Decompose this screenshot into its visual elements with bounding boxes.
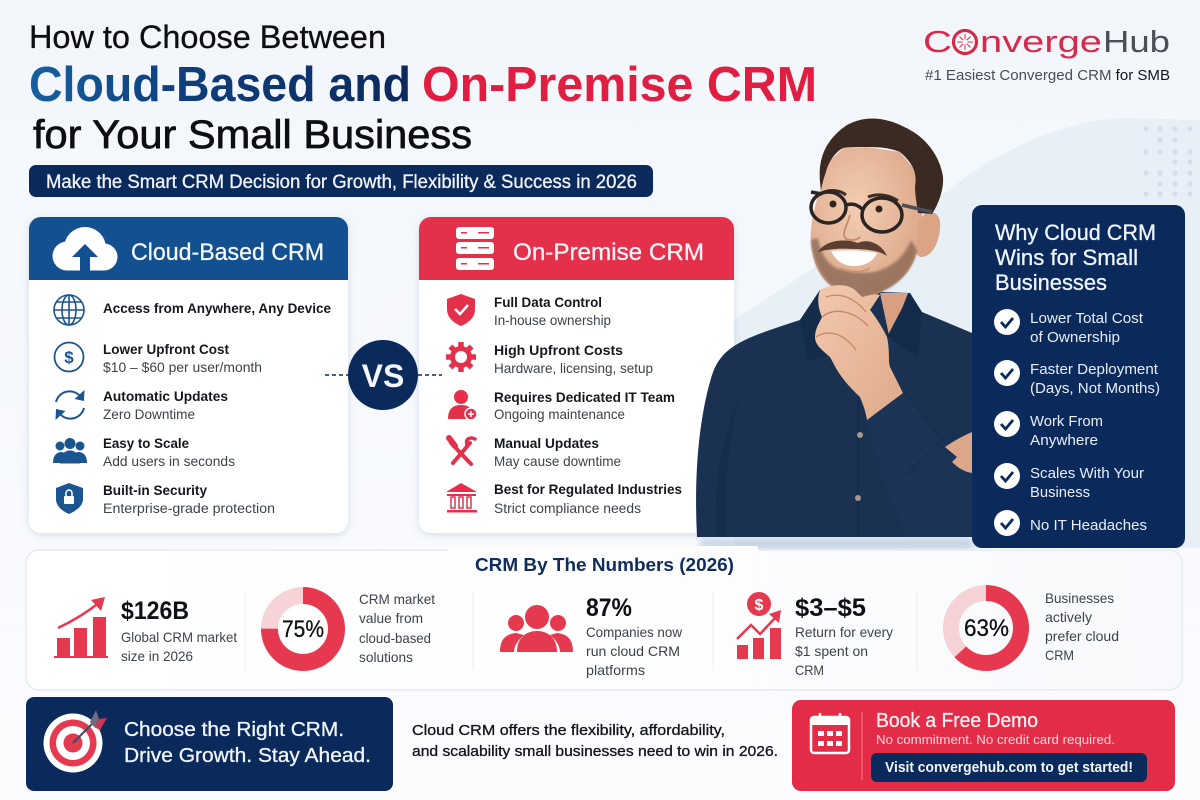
row: high upfront costs	[494, 342, 653, 376]
icon: return on investment: $	[755, 597, 764, 614]
row: built-in security	[103, 482, 275, 516]
row: full data control	[494, 294, 611, 328]
stat: $126B: $126B	[121, 597, 189, 625]
panel: CRM by the numbers	[26, 546, 1182, 690]
row: regulated industries: Strict compliance needs	[494, 500, 641, 516]
stat label: prefer cloud: CRM	[1045, 647, 1074, 663]
donut: 75%	[270, 596, 336, 662]
VS badge: VS	[362, 358, 404, 394]
subtitle pill: Make the Smart CRM Decision for Growth, Flexibility & Success in 2026	[46, 172, 637, 193]
icon: dollar	[54, 342, 84, 372]
donut: 63%: 63%	[964, 615, 1009, 642]
icon: calendar	[811, 713, 849, 753]
logo: ConvergeHub: Hub	[1103, 24, 1170, 59]
title block: How to Choose Between	[29, 19, 386, 55]
stat: $3–$5: $1 spent on	[795, 643, 868, 659]
logo: ConvergeHub	[923, 24, 1170, 84]
stat: $3–$5	[795, 594, 893, 678]
stat: 87%	[586, 594, 683, 678]
on-premise header	[419, 217, 734, 280]
icon: IT person	[448, 390, 477, 420]
stat: 87%: platforms	[586, 662, 645, 678]
banner: choose the right CRM: Drive Growth. Stay Ahead.	[124, 745, 371, 767]
why heading: Why Cloud CRM	[995, 220, 1156, 245]
row: lower upfront cost: $10 – $60 per user/month	[103, 359, 262, 375]
stat label: prefer cloud	[1045, 590, 1119, 663]
logo: ConvergeHub: #1 Easiest Converged CRM for SMB	[925, 68, 1170, 84]
stat label: market value: value from	[359, 610, 423, 626]
title block	[29, 19, 817, 157]
cloud header: Cloud-Based CRM	[131, 239, 324, 266]
closing statement	[412, 723, 778, 760]
icon: market growth chart	[54, 597, 108, 658]
call to action: book a free demo: No commitment. No credit card required.	[876, 733, 1115, 747]
row: dedicated IT team	[494, 389, 675, 422]
row: automatic updates: Automatic Updates	[103, 388, 228, 404]
stat label: market value: CRM market	[359, 591, 435, 607]
illustration: smiling man in navy shirt	[696, 118, 972, 550]
logo: ConvergeHub: C	[923, 24, 952, 59]
icon: security shield	[56, 483, 83, 514]
stat: 87%: run cloud CRM	[586, 643, 680, 659]
row: automatic updates: Zero Downtime	[103, 406, 195, 422]
title block: for Your Small Business	[33, 113, 472, 157]
stat: 87%: 87%	[586, 594, 632, 622]
check: faster deployment: Faster Deployment	[1030, 361, 1159, 378]
logo: ConvergeHub: nverge	[980, 24, 1102, 59]
row: dedicated IT team: Requires Dedicated IT Team	[494, 389, 675, 405]
check: work from anywhere: Work From	[1030, 413, 1103, 430]
closing statement: Cloud CRM offers the flexibility, affordability,	[412, 723, 725, 739]
row: manual updates: Manual Updates	[494, 435, 599, 451]
stat label: prefer cloud: actively	[1045, 609, 1092, 625]
row: manual updates	[494, 435, 621, 469]
title block: Cloud-Based and	[29, 58, 411, 112]
why heading	[995, 220, 1156, 295]
icon: return on investment	[737, 592, 781, 659]
icon: data shield	[447, 294, 475, 326]
check: scales with business	[994, 463, 1144, 501]
call to action: book a free demo	[792, 700, 1175, 791]
row: full data control: In-house ownership	[494, 312, 611, 328]
banner: choose the right CRM	[26, 697, 393, 791]
row: high upfront costs: High Upfront Costs	[494, 342, 623, 358]
banner: choose the right CRM: Choose the Right CRM.	[124, 719, 344, 741]
check: no IT headaches	[994, 510, 1147, 536]
stat label: market value: cloud-based	[359, 630, 431, 646]
decorative dot pattern	[1143, 126, 1193, 197]
panel: cloud-based CRM	[29, 217, 348, 533]
check: work from anywhere: Anywhere	[1030, 432, 1098, 449]
row: built-in security: Enterprise-grade protection	[103, 500, 275, 516]
why heading: Businesses	[995, 270, 1107, 295]
check: no IT headaches: No IT Headaches	[1030, 517, 1147, 534]
icon: tools	[449, 438, 475, 464]
stat: $3–$5: CRM	[795, 662, 824, 678]
stat label: market value	[359, 591, 435, 665]
check: scales with business: Scales With Your	[1030, 465, 1144, 482]
icon: gear	[446, 342, 476, 372]
icon: globe	[54, 295, 84, 325]
row: automatic updates	[103, 388, 228, 422]
subtitle pill	[29, 165, 653, 197]
donut: 63%	[951, 593, 1021, 663]
row: built-in security: Built-in Security	[103, 482, 207, 498]
why heading: Wins for Small	[995, 245, 1138, 270]
donut: 75%: 75%	[282, 616, 324, 643]
check: scales with business: Business	[1030, 484, 1090, 501]
on-premise header: On-Premise CRM	[513, 239, 704, 266]
row: manual updates: May cause downtime	[494, 453, 621, 469]
stat: $3–$5: $3–$5	[795, 594, 866, 622]
row: full data control: Full Data Control	[494, 294, 602, 310]
icon: regulated bank	[446, 483, 477, 512]
stat: 87%: Companies now	[586, 624, 683, 640]
check: work from anywhere	[994, 411, 1103, 449]
stat: $126B: size in 2026	[121, 648, 193, 664]
row: lower upfront cost	[103, 341, 262, 375]
row: access anywhere: Access from Anywhere, Any Device	[103, 300, 331, 316]
row: lower upfront cost: Lower Upfront Cost	[103, 341, 229, 357]
stat label: market value: solutions	[359, 649, 413, 665]
check: lower total cost: of Ownership	[1030, 329, 1120, 346]
button: visit website	[871, 753, 1147, 782]
stat: $126B: Global CRM market	[121, 629, 237, 645]
check: faster deployment	[994, 360, 1160, 397]
check: lower total cost	[994, 309, 1144, 346]
icon: people	[500, 605, 573, 652]
row: regulated industries: Best for Regulated Industries	[494, 481, 682, 497]
icon: team	[53, 438, 87, 464]
check: lower total cost: Lower Total Cost	[1030, 310, 1144, 327]
closing statement: and scalability small businesses need to win in 2026.	[412, 744, 778, 760]
row: easy to scale	[103, 435, 235, 469]
stat: $126B	[121, 597, 237, 664]
icon: dollar: $	[64, 348, 74, 367]
icon: target and dart	[44, 710, 107, 772]
row: easy to scale: Easy to Scale	[103, 435, 189, 451]
stat: $3–$5: Return for every	[795, 624, 893, 640]
panel: why cloud CRM wins	[972, 205, 1185, 548]
row: dedicated IT team: Ongoing maintenance	[494, 406, 625, 422]
call to action: book a free demo: Book a Free Demo	[876, 710, 1038, 732]
stats heading: CRM By The Numbers (2026)	[475, 555, 734, 575]
stat label: prefer cloud: prefer cloud	[1045, 628, 1119, 644]
button: visit website: Visit convergehub.com to get started!	[885, 760, 1133, 776]
row: regulated industries	[494, 481, 682, 516]
title block: On-Premise CRM	[422, 58, 817, 112]
check: faster deployment: (Days, Not Months)	[1030, 380, 1160, 397]
row: high upfront costs: Hardware, licensing, setup	[494, 360, 653, 376]
row: easy to scale: Add users in seconds	[103, 453, 235, 469]
VS badge	[325, 340, 442, 410]
stat label: prefer cloud: Businesses	[1045, 590, 1114, 606]
cloud header	[29, 217, 348, 280]
icon: sync	[56, 390, 84, 420]
panel: on-premise CRM	[419, 217, 734, 533]
